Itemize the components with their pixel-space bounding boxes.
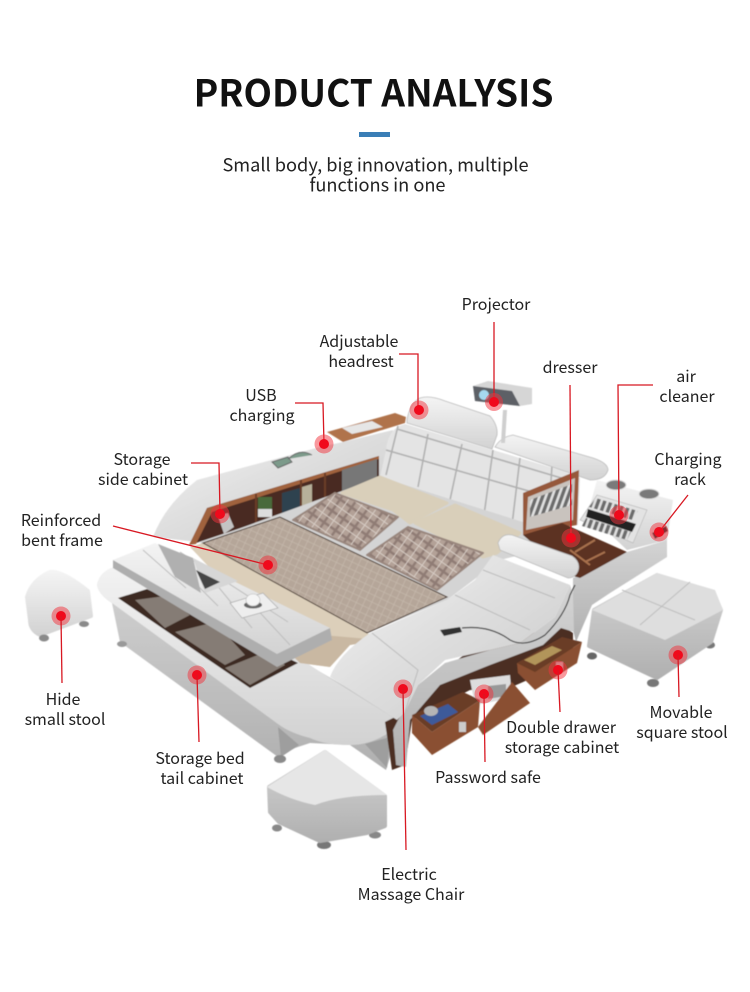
callout: USB charging: USB — [245, 382, 277, 406]
callout: dresser — [543, 354, 598, 548]
dresser mirror — [523, 470, 579, 535]
callout: Charging rack: rack — [674, 466, 706, 490]
control panel unit — [580, 480, 673, 550]
callout: air cleaner — [610, 363, 715, 524]
callout: dresser: dresser — [543, 354, 598, 378]
bed tail cabinet — [97, 560, 403, 770]
callout: Movable square stool: Movable — [650, 699, 713, 723]
callout: air cleaner: cleaner — [659, 383, 715, 407]
left headrest — [407, 397, 497, 449]
double drawer right — [517, 637, 582, 690]
callout: Storage bed tail cabinet — [155, 666, 245, 789]
laptop — [158, 544, 238, 593]
callout: Storage side cabinet: side cabinet — [98, 466, 188, 490]
callout: USB charging — [229, 382, 334, 454]
callout: Reinforced bent frame — [21, 507, 278, 574]
callout: Hide small stool: small stool — [25, 706, 105, 730]
lifted bench — [113, 543, 332, 667]
title accent bar — [359, 132, 390, 137]
subtitle — [222, 152, 529, 198]
square stool — [587, 573, 723, 687]
right headrest — [495, 435, 608, 480]
callout: Password safe — [435, 684, 541, 788]
callout: Movable square stool — [636, 646, 728, 743]
title: PRODUCT ANALYSIS — [194, 64, 553, 118]
plaid pillow left — [293, 493, 398, 550]
left storage arm — [153, 430, 393, 545]
subtitle: Small body, big innovation, multiple — [222, 152, 529, 178]
bed illustration — [27, 381, 723, 849]
headboard — [380, 424, 580, 525]
tray with cup — [230, 593, 278, 618]
password safe — [470, 675, 530, 735]
callout: Charging rack: Charging — [654, 446, 722, 470]
callout: Movable square stool: square stool — [636, 719, 728, 743]
double drawer left — [412, 692, 480, 755]
blanket — [203, 517, 447, 633]
callout: Double drawer storage cabinet: storage cabinet — [505, 734, 619, 758]
callout: Adjustable headrest — [320, 328, 428, 420]
callout: Storage bed tail cabinet: tail cabinet — [161, 765, 243, 789]
callout: Reinforced bent frame: bent frame — [21, 527, 103, 551]
projector — [473, 381, 532, 443]
mattress base — [200, 477, 580, 633]
callout: Password safe: Password safe — [435, 764, 541, 788]
callout: Hide small stool — [25, 606, 105, 730]
callout: Adjustable headrest: headrest — [328, 348, 394, 372]
callout: Adjustable headrest: Adjustable — [320, 328, 399, 352]
callout: Hide small stool: Hide — [46, 686, 81, 710]
callout: Projector — [462, 291, 531, 411]
cream pillow left — [342, 477, 447, 523]
callout: Double drawer storage cabinet: Double drawer — [506, 714, 617, 738]
subtitle: functions in one — [309, 172, 446, 198]
callout: air cleaner: air — [676, 363, 697, 387]
magazine on shelf — [342, 421, 383, 434]
quarter stool — [267, 750, 387, 849]
callout: Reinforced bent frame: Reinforced — [21, 507, 101, 531]
charger — [652, 526, 668, 539]
compartment tray — [523, 523, 627, 578]
plaid pillow right — [367, 527, 483, 590]
right cabinet body — [573, 540, 667, 642]
callout: Charging rack — [650, 446, 722, 542]
hidden small stool — [27, 572, 91, 642]
callout: Storage bed tail cabinet: Storage bed — [155, 745, 245, 769]
callout: USB charging: charging — [229, 402, 295, 426]
callout: Double drawer storage cabinet — [505, 660, 619, 758]
callout: Electric Massage Chair: Massage Chair — [358, 881, 465, 905]
cream sheet — [190, 543, 380, 667]
callout: Projector: Projector — [462, 291, 531, 315]
callout: Storage side cabinet — [98, 446, 230, 524]
callout: Electric Massage Chair: Electric — [381, 861, 437, 885]
callout: Storage side cabinet: Storage — [113, 446, 171, 470]
cream pillow right — [415, 505, 520, 557]
sheet lower texture — [265, 630, 380, 667]
side shelf top — [327, 413, 406, 442]
massage chair — [330, 535, 579, 770]
callout: Electric Massage Chair — [358, 680, 465, 905]
